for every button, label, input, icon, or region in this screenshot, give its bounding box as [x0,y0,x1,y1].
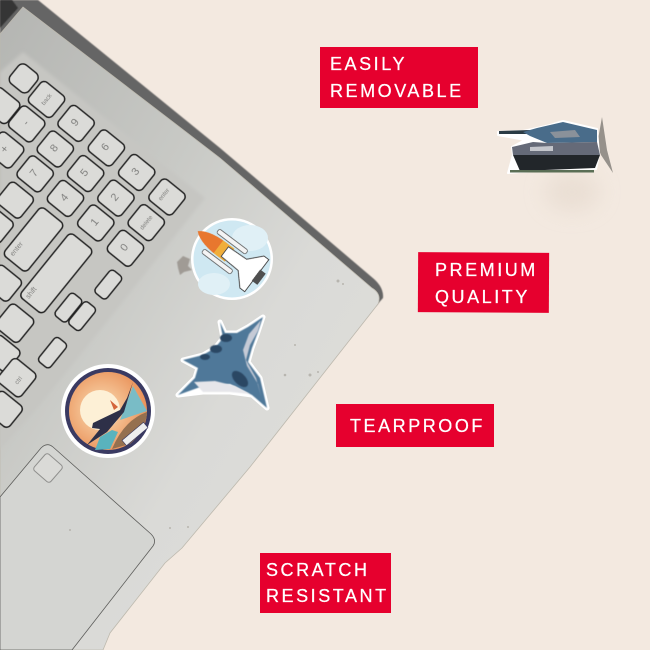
key labels: enter [9,240,25,258]
laptop [0,0,383,650]
key labels: back [41,93,54,107]
key labels: 3 [129,166,143,178]
surface speckles [69,280,344,531]
sticker: airplane badge [61,364,155,458]
label: scratch resistant [260,553,391,613]
touchpad [0,445,155,650]
label: premium quality: QUALITY [435,287,530,307]
key labels: 1 [88,216,102,228]
sticker: space shuttle [186,215,274,300]
tank outline [498,121,599,173]
key labels: 8 [48,142,61,155]
key labels: 7 [28,167,41,179]
sticker: tank [498,117,613,212]
laptop corner shadow [0,0,18,28]
jet dark details [200,334,251,390]
label: premium quality: PREMIUM [435,260,538,280]
keyboard [0,60,193,429]
tank wall shadow [544,172,600,212]
tank hull and turret [499,122,600,172]
sticker: fighter jet [178,317,267,408]
key labels: 2 [109,191,122,204]
fingerprint sensor [32,452,64,484]
laptop dark edge [0,0,383,306]
key labels: 0 [118,242,131,254]
key labels [0,89,175,387]
shuttle [186,215,274,295]
key labels: enter [158,188,171,202]
label: scratch resistant: RESISTANT [266,586,389,606]
label: tearproof [336,404,494,447]
label: scratch resistant: SCRATCH [266,560,370,580]
logo smudge [177,256,192,275]
label: easily removable: REMOVABLE [330,81,464,101]
key labels: shift [25,286,39,301]
badge plate [122,422,148,446]
label: premium quality [418,252,549,313]
keyboard well [0,52,205,450]
key labels: - [20,117,32,128]
key labels: 6 [99,141,112,153]
key labels: 5 [78,167,91,179]
key labels: 9 [69,117,82,129]
peeled corner shadow [597,117,613,173]
key labels: 4 [58,192,71,204]
key labels: ctrl [14,376,24,386]
airplane [87,382,133,445]
key labels: delete [140,215,155,232]
laptop silver body [0,7,379,650]
label: easily removable [320,47,478,108]
label: easily removable: EASILY [330,54,407,74]
label: tearproof: TEARPROOF [350,416,485,436]
